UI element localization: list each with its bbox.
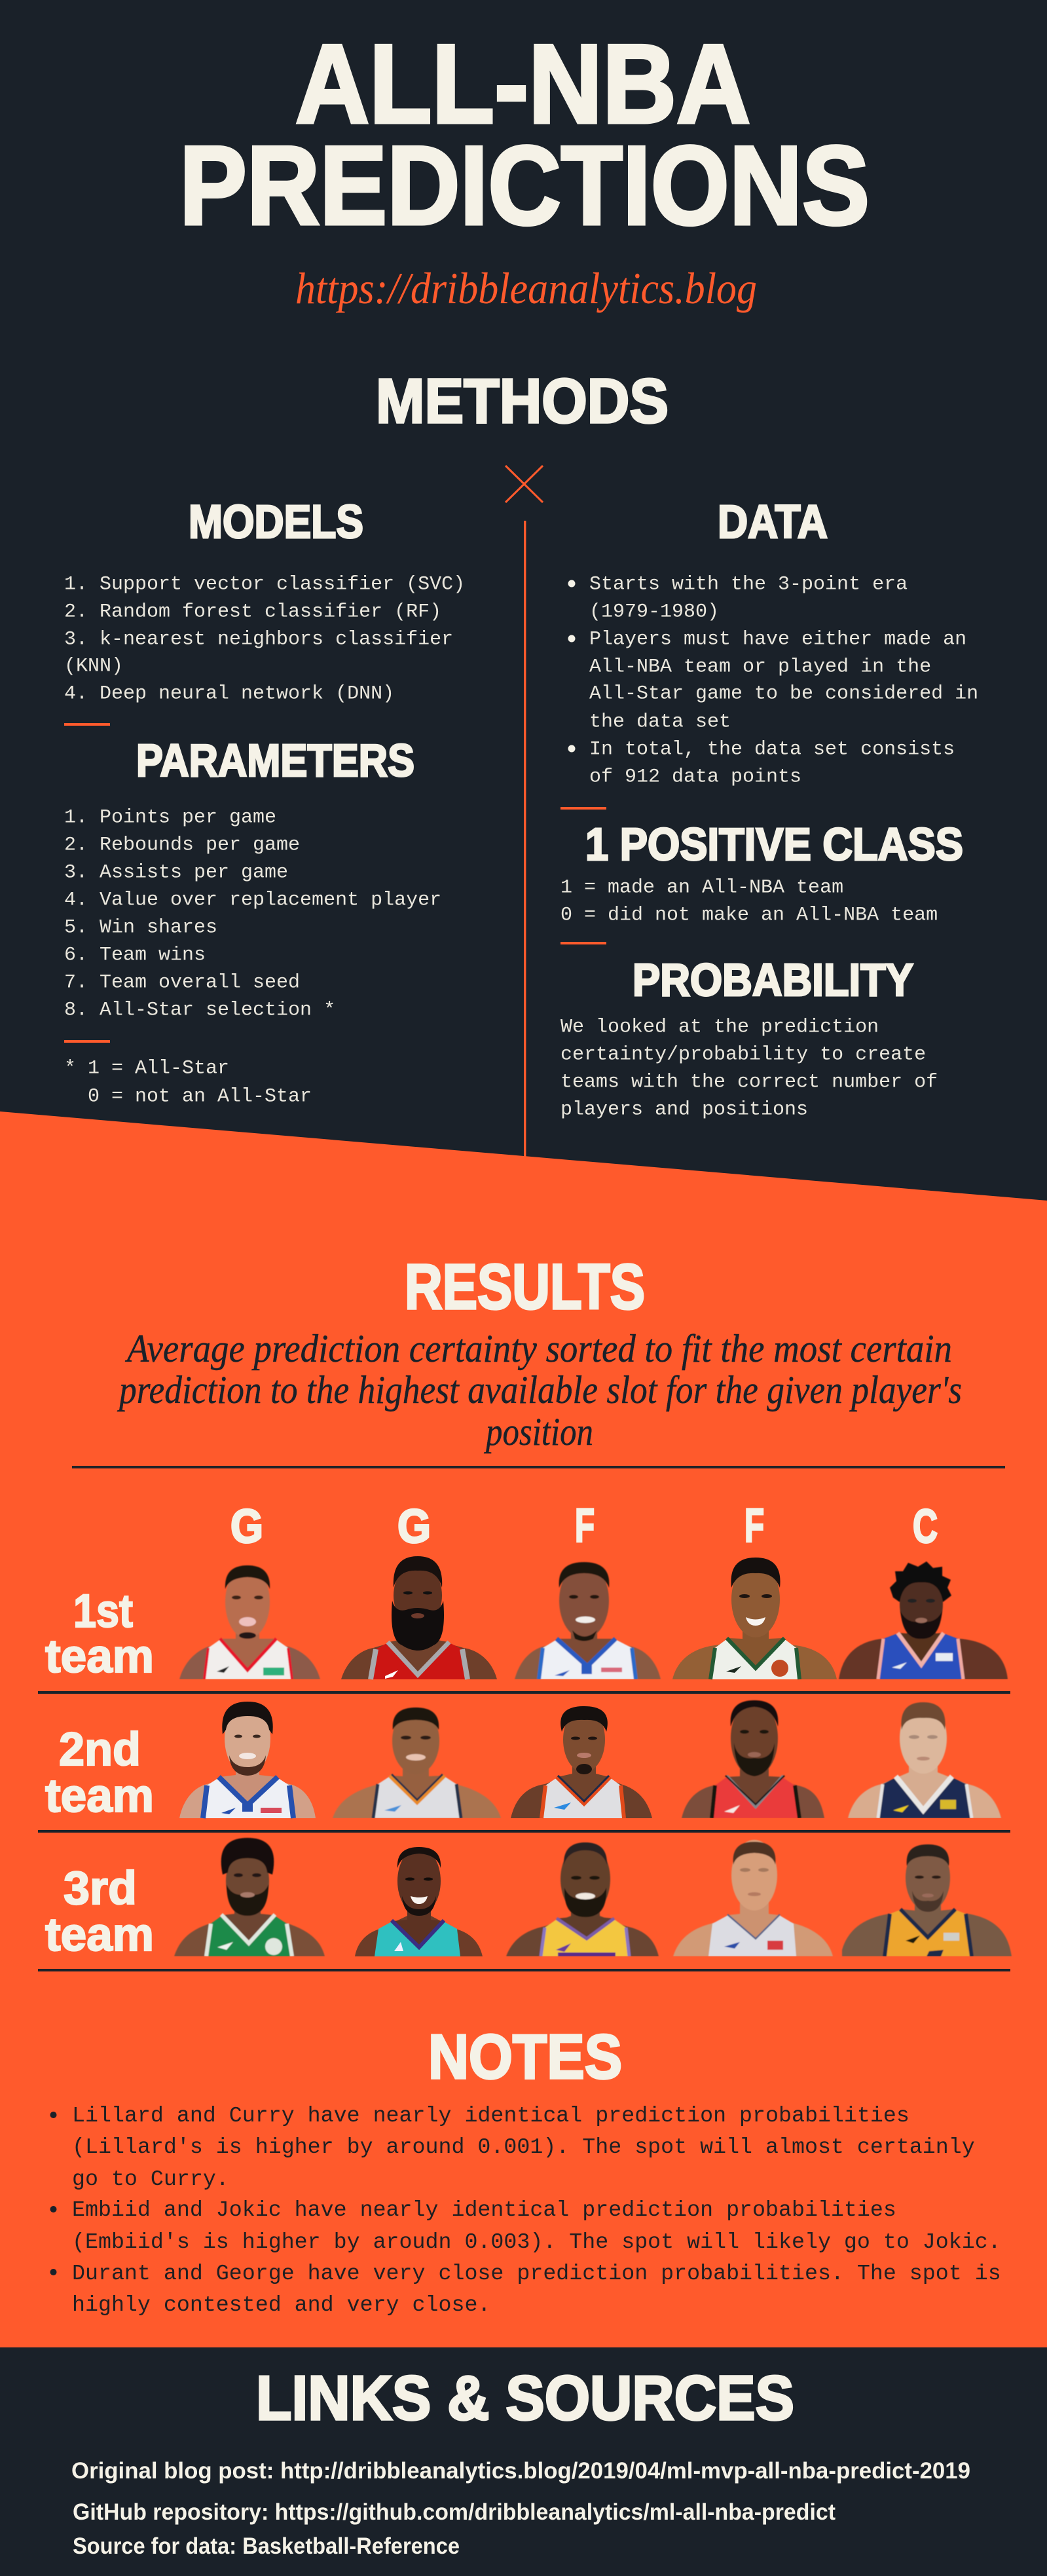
parameters list	[64, 807, 441, 1022]
positive class definition: 1 = made an All-NBA team	[560, 876, 843, 899]
heading: methods: METHODS	[376, 366, 669, 436]
notes list: (Lillard's is higher by around 0.001). The spot will almost certainly	[72, 2135, 975, 2159]
notes list: Lillard and Curry have nearly identical prediction probabilities	[72, 2103, 909, 2128]
icon: cross	[505, 466, 543, 502]
panel: parameters	[64, 735, 441, 1022]
notes list: Embiid and Jokic have nearly identical prediction probabilities	[72, 2197, 896, 2222]
position headers: F	[744, 1500, 764, 1552]
models list	[64, 574, 465, 705]
panel: results	[38, 1251, 1012, 1971]
player: Jokic	[848, 1702, 1001, 1818]
source links: GitHub repository: https://github.com/dribbleanalytics/ml-all-nba-predict	[73, 2499, 836, 2525]
parameters list: 2. Rebounds per game	[64, 834, 300, 857]
data bullets: Players must have either made an	[589, 629, 966, 651]
position headers: G	[397, 1501, 431, 1553]
row label: 2nd team: 2nd	[59, 1724, 141, 1776]
player: Leonard	[682, 1700, 824, 1818]
heading: results: RESULTS	[405, 1251, 645, 1322]
data bullets: In total, the data set consists	[589, 739, 955, 761]
data bullets: Starts with the 3-point era	[589, 574, 908, 596]
results subtitle: Average prediction certainty sorted to fit the most certain	[124, 1327, 952, 1370]
panel: methods	[64, 366, 978, 1157]
row label: 2nd team	[45, 1724, 154, 1822]
probability description	[560, 1017, 938, 1121]
position headers: G	[230, 1501, 263, 1553]
data bullets: All-Star game to be considered in	[589, 682, 978, 705]
column divider	[524, 521, 526, 1157]
row label: 3rd team: team	[45, 1909, 154, 1961]
heading: positive class: 1 POSITIVE CLASS	[585, 819, 963, 870]
data bullets	[568, 574, 978, 789]
results subtitle	[117, 1327, 962, 1453]
results subtitle: position	[484, 1410, 593, 1453]
models list: (KNN)	[64, 655, 123, 677]
row label: 2nd team: team	[45, 1770, 154, 1822]
player: Walker	[355, 1847, 483, 1956]
panel: probability	[560, 954, 938, 1121]
probability description: We looked at the prediction	[560, 1017, 879, 1039]
parameters list: 1. Points per game	[64, 807, 276, 829]
player: Gobert	[842, 1844, 1012, 1956]
source links	[71, 2458, 970, 2559]
position headers	[230, 1500, 938, 1553]
blog url: https://dribbleanalytics.blog	[295, 263, 757, 313]
parameters list: 4. Value over replacement player	[64, 889, 441, 912]
all-star footnote: * 1 = All-Star	[64, 1057, 229, 1079]
row label: 3rd team: 3rd	[64, 1863, 137, 1914]
row label: 1st team: 1st	[73, 1586, 133, 1637]
all-star footnote	[64, 1057, 312, 1108]
data bullets: of 912 data points	[589, 766, 801, 789]
panel: models	[64, 496, 465, 705]
title: PREDICTIONS	[179, 123, 870, 248]
data bullets: All-NBA team or played in the	[589, 656, 931, 679]
models list: 3. k-nearest neighbors classifier	[64, 629, 453, 651]
positive class definition: 0 = did not make an All-NBA team	[560, 904, 938, 926]
probability description: players and positions	[560, 1099, 808, 1121]
notes list: highly contested and very close.	[72, 2292, 490, 2317]
panel: positive class	[560, 819, 963, 926]
models list: 1. Support vector classifier (SVC)	[64, 574, 465, 596]
notes list	[50, 2103, 1001, 2317]
player: James	[506, 1842, 659, 1956]
parameters list: 8. All-Star selection *	[64, 999, 335, 1022]
models list: 4. Deep neural network (DNN)	[64, 682, 394, 705]
header	[179, 22, 870, 313]
heading: parameters: PARAMETERS	[136, 735, 414, 786]
row label: 3rd team	[45, 1863, 154, 1961]
data bullets: the data set	[589, 711, 731, 734]
panel: links and sources	[71, 2363, 970, 2559]
notes list: Durant and George have very close prediction probabilities. The spot is	[72, 2261, 1001, 2286]
position headers: F	[575, 1500, 595, 1552]
notes list: go to Curry.	[72, 2167, 229, 2192]
heading: models: MODELS	[189, 496, 363, 548]
parameters list: 6. Team wins	[64, 944, 206, 967]
heading: data: DATA	[718, 496, 828, 548]
player: George	[511, 1706, 652, 1818]
notes list: (Embiid's is higher by aroudn 0.003). The spot will likely go to Jokic.	[72, 2230, 1001, 2254]
title: ALL-NBA	[295, 22, 750, 147]
player: Curry	[179, 1702, 316, 1818]
heading: links and sources: LINKS & SOURCES	[256, 2363, 794, 2433]
parameters list: 7. Team overall seed	[64, 972, 300, 994]
heading: notes: NOTES	[428, 2022, 622, 2092]
player: Griffin	[673, 1840, 833, 1956]
models list: 2. Random forest classifier (RF)	[64, 601, 441, 624]
row label: 1st team: team	[45, 1631, 154, 1683]
probability description: teams with the correct number of	[560, 1072, 938, 1094]
player: Giannis	[672, 1558, 837, 1679]
parameters list: 3. Assists per game	[64, 862, 288, 884]
all-star footnote: 0 = not an All-Star	[64, 1086, 312, 1108]
position headers: C	[913, 1501, 938, 1553]
results subtitle: prediction to the highest available slot for the given player's	[117, 1368, 962, 1411]
player: Harden	[341, 1556, 497, 1679]
player: Lillard	[179, 1565, 320, 1679]
data bullets: (1979-1980)	[589, 601, 719, 624]
panel: notes	[50, 2022, 1001, 2317]
title	[179, 22, 870, 248]
player: Durant	[515, 1562, 661, 1679]
player: Embiid	[839, 1561, 1008, 1679]
player: Westbrook	[333, 1708, 501, 1818]
heading: probability: PROBABILITY	[633, 954, 913, 1005]
parameters list: 5. Win shares	[64, 917, 217, 939]
probability description: certainty/probability to create	[560, 1044, 926, 1066]
panel: data	[568, 496, 978, 789]
positive class definition	[560, 876, 938, 926]
row label: 1st team	[45, 1586, 154, 1683]
source links: Original blog post: http://dribbleanalytics.blog/2019/04/ml-mvp-all-nba-predict-2019	[71, 2458, 970, 2484]
source links: Source for data: Basketball-Reference	[73, 2533, 460, 2559]
panel: results background	[0, 1111, 1047, 2347]
player: Irving	[174, 1838, 325, 1956]
